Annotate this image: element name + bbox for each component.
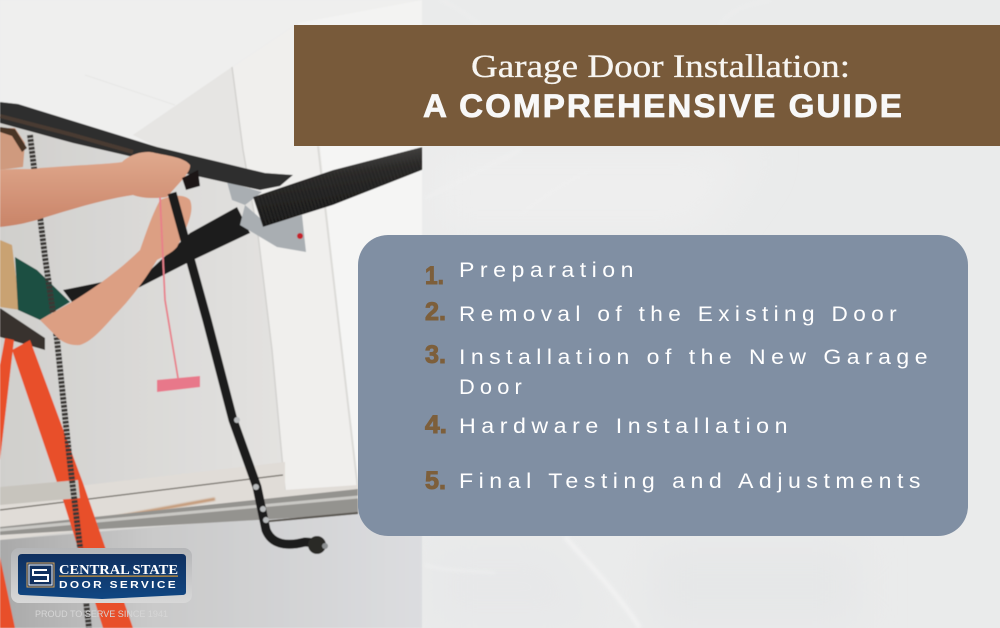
step 4 (425, 411, 793, 439)
ladder metal brace (0, 480, 80, 505)
logo mark (27, 563, 54, 587)
lower torsion spring (63, 207, 250, 302)
step 2: Removal of the Existing Door (459, 303, 902, 326)
steps panel (358, 235, 968, 536)
logo tagline: PROUD TO SERVE SINCE 1941 (35, 609, 168, 620)
step 3: 3. (425, 341, 446, 369)
installer shirt (15, 257, 70, 320)
lower arm (40, 196, 191, 345)
overhead rail (0, 102, 293, 190)
door arm bracket (234, 417, 328, 554)
step 1: 1. (425, 262, 444, 290)
red bolt (297, 233, 303, 239)
ladder top (0, 308, 45, 350)
cardboard box (0, 240, 20, 310)
photo: walls and ceiling (0, 0, 422, 628)
installer hair (0, 127, 27, 152)
belt (30, 135, 89, 628)
door arm (172, 193, 317, 544)
logo subtitle: DOOR SERVICE (59, 580, 178, 591)
step 5: 5. (425, 467, 446, 495)
step 4: Hardware Installation (459, 415, 793, 438)
logo divider (59, 576, 178, 577)
pull handle (157, 376, 200, 392)
logo name: CENTRAL STATE (59, 563, 178, 578)
photo: garage door installation (0, 0, 422, 628)
ladder (0, 338, 133, 628)
title line 1: Garage Door Installation: (471, 49, 850, 85)
upper torsion spring (253, 147, 422, 227)
step 3: Installation of the New Garage (459, 346, 933, 369)
pull cord (160, 197, 178, 378)
installer face (0, 128, 25, 170)
step 2: 2. (425, 298, 446, 326)
spring bracket (227, 182, 306, 252)
step 3: Door (459, 376, 527, 399)
step 5 (425, 467, 926, 495)
rail clamp (182, 170, 200, 190)
title banner (294, 25, 1000, 146)
company logo (11, 548, 192, 620)
step 3 (425, 341, 933, 399)
title line 2: A COMPREHENSIVE GUIDE (423, 88, 904, 124)
upper arm (0, 152, 190, 227)
step 4: 4. (425, 411, 447, 439)
step 5: Final Testing and Adjustments (459, 470, 926, 493)
step 1: Preparation (459, 259, 639, 282)
step 1 (425, 259, 639, 290)
